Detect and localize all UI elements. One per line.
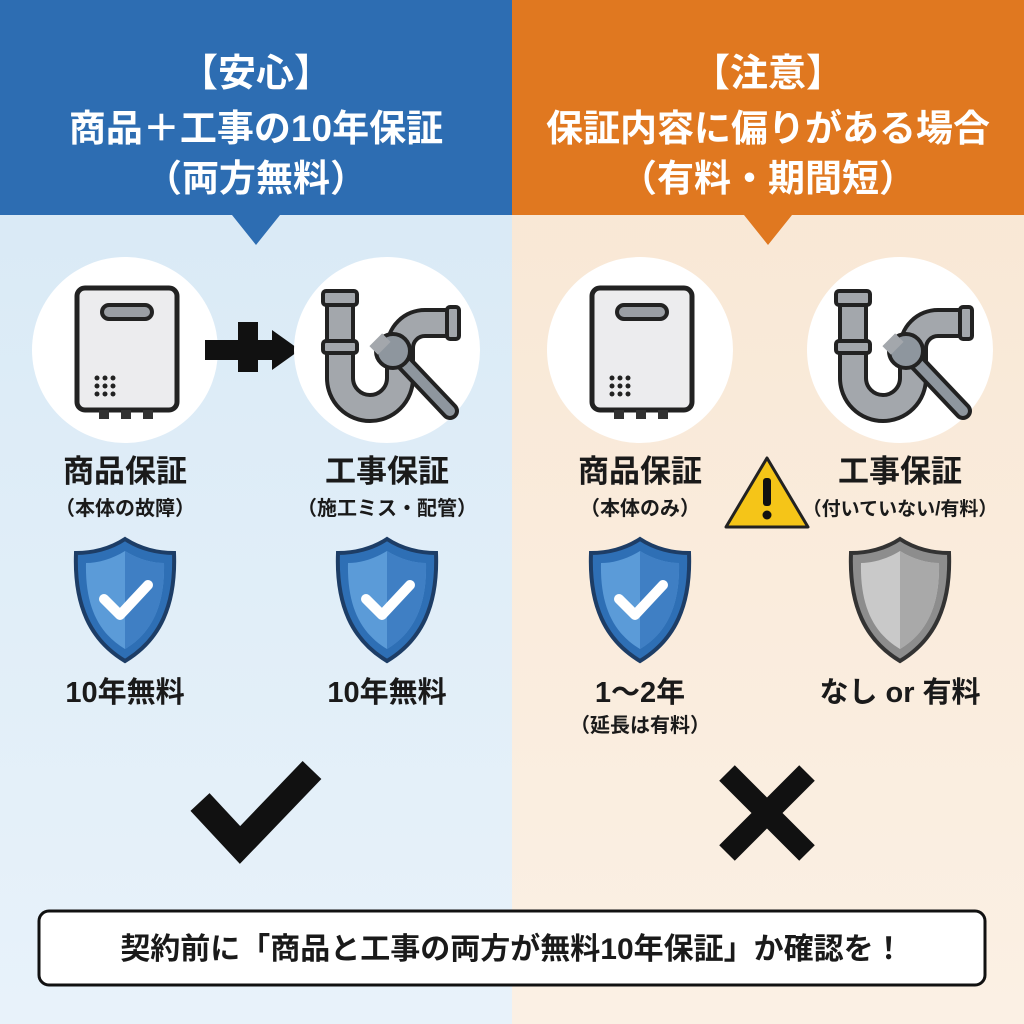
right: product warranty column (547, 257, 733, 737)
header: left: （両方無料） (145, 158, 367, 199)
left: construction warranty column: 10年無料 (327, 676, 447, 709)
left: product warranty column (32, 257, 218, 709)
icon: big X (727, 773, 807, 853)
left: construction warranty column: （施工ミス・配管） (297, 497, 477, 520)
header: left (0, 0, 512, 245)
panel: left background (0, 0, 512, 1024)
right: product warranty column: （本体のみ） (580, 497, 700, 520)
icon: warning (726, 458, 808, 527)
icon: big check (200, 770, 312, 845)
left: construction warranty column (294, 257, 480, 709)
right: construction warranty column (803, 257, 997, 709)
left: product warranty column: 商品保証 (63, 454, 187, 489)
left: product warranty column: （本体の故障） (55, 497, 195, 520)
panel: right background (512, 0, 1024, 1024)
header: right: 【注意】 (692, 53, 844, 95)
header: right: （有料・期間短） (620, 158, 916, 199)
header: right: 保証内容に偏りがある場合 (546, 108, 990, 149)
right: product warranty column: （延長は有料） (570, 714, 710, 737)
callout: bottom: 契約前に「商品と工事の両方が無料10年保証」か確認を！ (120, 932, 904, 966)
right: product warranty column: 1～2年 (595, 676, 685, 709)
header: left: 【安心】 (180, 53, 332, 95)
header: right (512, 0, 1024, 245)
arrow: plus (205, 322, 300, 372)
right: construction warranty column: なし or 有料 (819, 676, 981, 709)
right: construction warranty column: 工事保証 (838, 454, 962, 489)
left: construction warranty column: 工事保証 (325, 454, 449, 489)
header: left: 商品＋工事の10年保証 (69, 108, 443, 149)
left: product warranty column: 10年無料 (65, 676, 185, 709)
right: product warranty column: 商品保証 (578, 454, 702, 489)
right: construction warranty column: （付いていない/有料） (803, 498, 997, 520)
callout: bottom (39, 911, 985, 985)
